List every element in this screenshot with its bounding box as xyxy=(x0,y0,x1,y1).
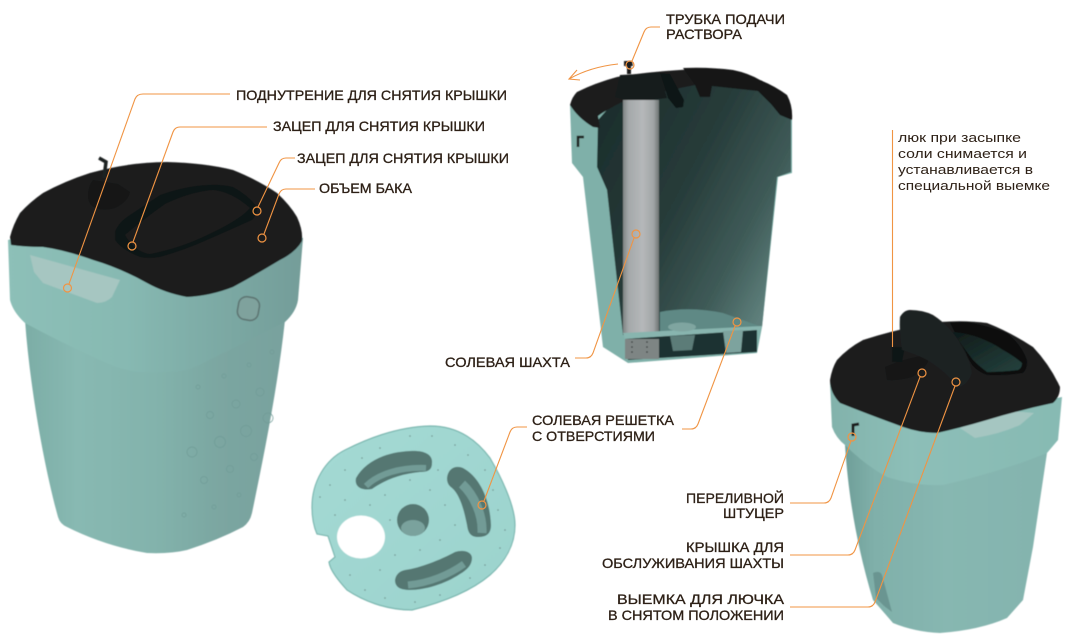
label: salt grate: СОЛЕВАЯ РЕШЕТКА xyxy=(532,412,675,428)
label: hatch recess: ВЫЕМКА ДЛЯ ЛЮЧКА xyxy=(617,591,785,607)
hatch standing upright xyxy=(900,310,972,387)
leader: lid catch two xyxy=(253,158,295,215)
label: salt grate xyxy=(532,412,675,444)
right slot xyxy=(447,467,491,537)
salt shaft xyxy=(623,100,659,334)
plate body xyxy=(312,426,515,610)
label: salt grate: С ОТВЕРСТИЯМИ xyxy=(532,428,655,444)
grate post two xyxy=(723,330,743,353)
salt grate edge xyxy=(623,326,762,339)
arrow: tube direction xyxy=(569,64,618,80)
overflow fitting xyxy=(578,137,584,147)
under-grate chamber xyxy=(625,330,757,360)
illustration: tank cross-section xyxy=(570,61,792,363)
label: shaft service cover: ОБСЛУЖИВАНИЯ ШАХТЫ xyxy=(602,555,784,571)
label: solution tube: ТРУБКА ПОДАЧИ xyxy=(666,11,785,27)
tank body xyxy=(25,320,285,553)
lid hatch recess xyxy=(115,185,257,258)
open tank collar xyxy=(830,383,1062,485)
section lid right xyxy=(683,68,792,120)
solution tube on lid xyxy=(624,61,633,74)
lower shaft section xyxy=(625,339,659,359)
lid channel section xyxy=(660,73,684,108)
label: overflow fitting: ПЕРЕЛИВНОЙ xyxy=(686,489,784,506)
body drain notch xyxy=(873,572,892,612)
socket floor xyxy=(401,520,425,536)
floor opening xyxy=(668,322,696,332)
shaft perforations xyxy=(631,341,648,353)
note: hatch for salt filling: люк при засыпке xyxy=(898,130,1021,145)
tank collar xyxy=(8,200,303,372)
upper slot floor xyxy=(366,468,426,486)
label: shaft service cover xyxy=(602,539,784,571)
note: hatch for salt filling: соли снимается и xyxy=(898,146,1027,161)
tube fitting xyxy=(99,158,106,178)
cap on lid xyxy=(885,355,928,380)
lid recess notch xyxy=(30,255,120,303)
label: lid undercut: ПОДНУТРЕНИЕ ДЛЯ СНЯТИЯ КРЫШКИ xyxy=(236,87,507,103)
upper slot xyxy=(356,451,432,490)
illustration: salt grate plate xyxy=(312,426,515,610)
illustration: tank with open hatch xyxy=(830,310,1062,633)
grate post one xyxy=(670,335,695,351)
section lid left xyxy=(570,69,700,128)
leader: hatch recess xyxy=(790,378,960,607)
shaft cap xyxy=(615,73,667,100)
tank interior xyxy=(597,78,791,335)
label: lid catch one: ЗАЦЕП ДЛЯ СНЯТИЯ КРЫШКИ xyxy=(273,118,485,134)
label: hatch recess xyxy=(608,591,785,623)
label: tank volume: ОБЪЕМ БАКА xyxy=(319,180,413,196)
logo badge xyxy=(236,295,261,322)
tank opening rim xyxy=(950,322,1027,375)
label: solution tube xyxy=(666,11,785,42)
note: hatch for salt filling: устанавливается в xyxy=(898,162,1033,177)
label: solution tube: РАСТВОРА xyxy=(666,26,743,42)
label: shaft service cover: КРЫШКА ДЛЯ xyxy=(686,539,784,555)
leader: lid undercut xyxy=(64,94,230,292)
note: hatch for salt filling xyxy=(898,130,1050,193)
label: overflow fitting xyxy=(686,489,784,521)
illustration: closed tank with lid xyxy=(8,158,303,553)
label: hatch recess: В СНЯТОМ ПОЛОЖЕНИИ xyxy=(608,607,784,623)
open tank lid xyxy=(830,321,1060,433)
surface dimples xyxy=(182,350,274,517)
label: salt shaft: СОЛЕВАЯ ШАХТА xyxy=(445,354,571,370)
note: hatch for salt filling: специальной выемке xyxy=(898,178,1050,193)
leader: shaft service cover xyxy=(790,369,926,555)
collar grip recess xyxy=(960,410,1034,438)
leader: lid catch one xyxy=(128,127,267,250)
overflow spout xyxy=(853,424,859,436)
lid cap xyxy=(88,180,130,210)
plate perforation dots xyxy=(319,435,506,603)
floor of tank xyxy=(660,309,762,333)
right slot floor xyxy=(462,484,482,533)
leader: tank volume xyxy=(258,189,315,242)
open tank body xyxy=(845,445,1047,633)
label: lid catch two: ЗАЦЕП ДЛЯ СНЯТИЯ КРЫШКИ xyxy=(297,150,509,166)
leader: salt shaft xyxy=(575,230,640,358)
tube base behind hatch xyxy=(892,347,905,362)
leader: hatch note xyxy=(892,130,894,347)
black lid xyxy=(10,162,302,297)
lower slot xyxy=(395,551,472,590)
leader: overflow fitting xyxy=(790,433,856,503)
leader: grate plate xyxy=(478,427,527,509)
leader: grate in section xyxy=(682,318,741,429)
tank opening glass xyxy=(952,332,1022,372)
label: overflow fitting: ШТУЦЕР xyxy=(723,505,784,521)
section outer wall xyxy=(570,100,792,363)
centre socket xyxy=(397,504,429,536)
plate hole xyxy=(337,516,385,558)
lower slot floor xyxy=(408,564,464,585)
lid hatch xyxy=(125,190,250,254)
leader: solution tube xyxy=(626,27,660,69)
